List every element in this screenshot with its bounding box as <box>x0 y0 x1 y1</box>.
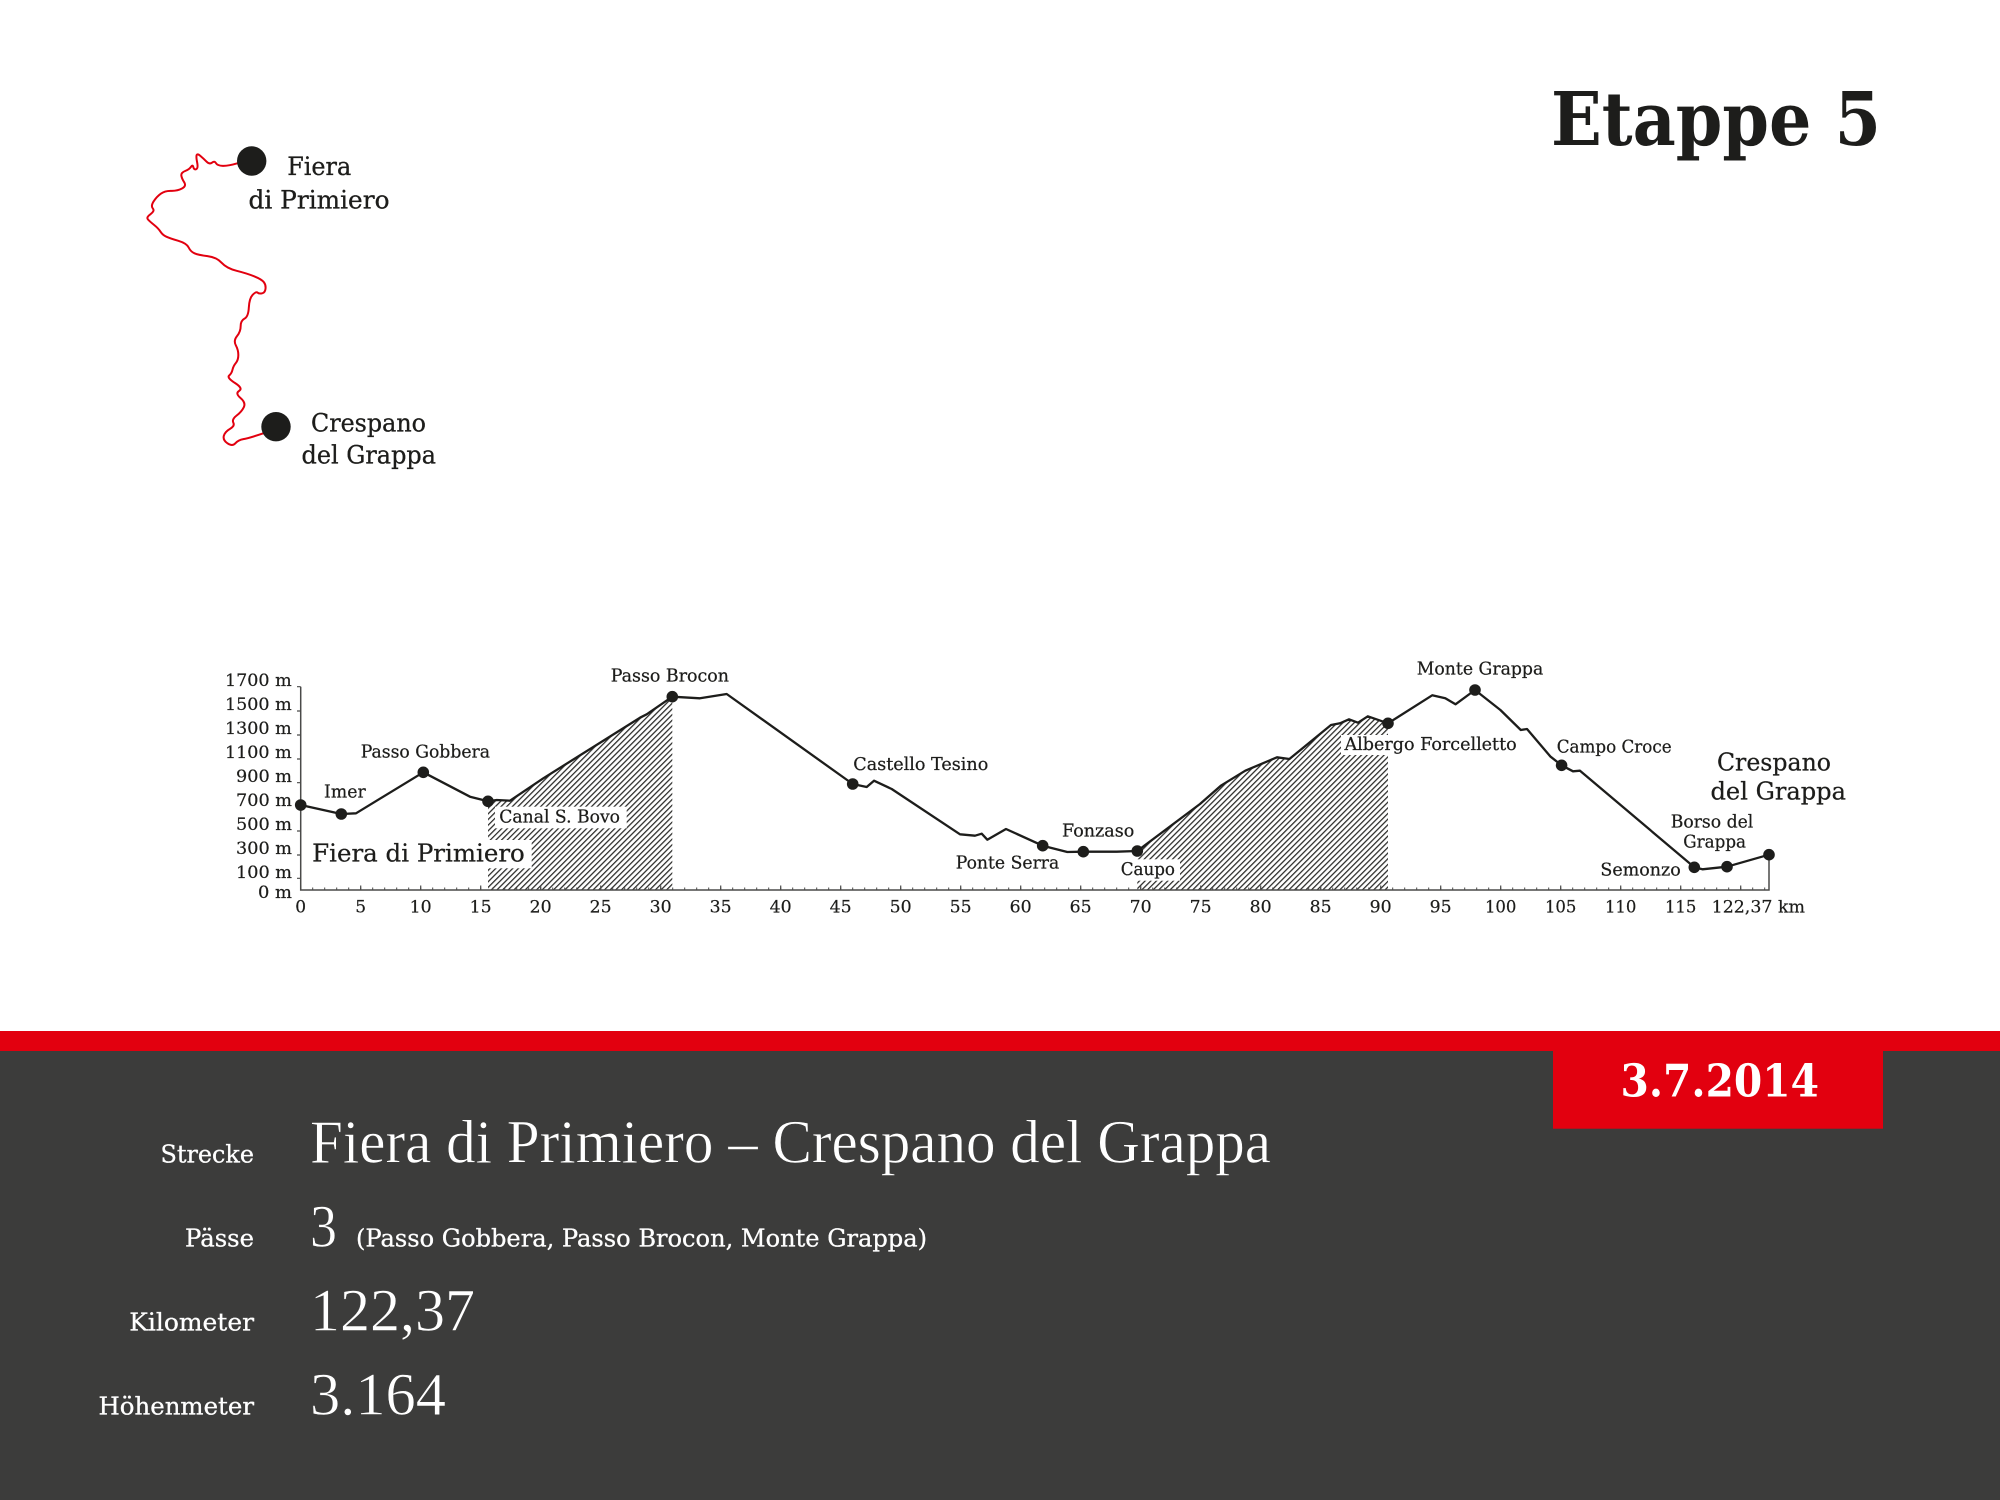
y axis labels: 300 m <box>236 839 292 859</box>
waypoint labels <box>312 658 1846 881</box>
x axis labels: 122,37 km <box>1712 897 1805 917</box>
title: Etappe 5 <box>1551 77 1881 163</box>
row: Höhenmeter <box>98 1362 446 1428</box>
row: Pässe: 3 <box>310 1194 337 1260</box>
x axis labels: 95 <box>1430 897 1452 917</box>
row: Kilometer <box>129 1278 475 1344</box>
elevation profile chart <box>225 658 1846 917</box>
waypoint labels: Crespano <box>1717 749 1831 777</box>
x axis labels: 75 <box>1190 897 1212 917</box>
x axis labels: 110 <box>1605 897 1636 917</box>
route map <box>147 146 436 469</box>
dark info panel <box>0 1051 2000 1500</box>
date badge: 3.7.2014 <box>1620 1055 1819 1108</box>
x axis labels: 85 <box>1310 897 1332 917</box>
x axis labels: 65 <box>1070 897 1092 917</box>
waypoint labels: Grappa <box>1683 832 1746 853</box>
x axis labels: 5 <box>355 897 366 917</box>
x axis labels: 55 <box>950 897 972 917</box>
x axis labels: 50 <box>890 897 912 917</box>
x axis labels: 105 <box>1545 897 1576 917</box>
elevation line <box>301 690 1769 869</box>
row: Strecke: Strecke <box>160 1141 254 1169</box>
row: Kilometer: Kilometer <box>129 1309 255 1337</box>
waypoint labels: Passo Brocon <box>611 666 729 687</box>
hatched area: climb to Passo Brocon <box>488 697 672 890</box>
waypoint labels: Fiera di Primiero <box>312 840 525 868</box>
red route line <box>147 154 266 445</box>
y axis labels: 1300 m <box>225 719 292 739</box>
waypoint labels: Imer <box>324 782 366 803</box>
end label <box>302 409 436 469</box>
waypoint labels: Albergo Forcelletto <box>1344 734 1517 755</box>
y axis labels: 0 m <box>258 883 292 903</box>
end label: Crespano <box>311 409 426 438</box>
x axis labels: 70 <box>1130 897 1152 917</box>
x axis labels: 25 <box>590 897 612 917</box>
red stripe <box>0 1031 2000 1051</box>
axes <box>297 687 1769 890</box>
end label: del Grappa <box>302 440 436 469</box>
end marker <box>261 412 291 441</box>
waypoint labels: Campo Croce <box>1557 737 1672 758</box>
y axis labels: 900 m <box>236 767 292 787</box>
waypoint labels: Castello Tesino <box>853 754 988 775</box>
y axis labels: 1100 m <box>225 743 292 763</box>
x axis labels: 35 <box>710 897 732 917</box>
y axis labels: 1500 m <box>225 695 292 715</box>
waypoint labels: Fonzaso <box>1062 821 1134 842</box>
x axis labels: 20 <box>530 897 552 917</box>
x axis labels: 10 <box>410 897 432 917</box>
y axis labels: 700 m <box>236 791 292 811</box>
x axis labels: 115 <box>1665 897 1696 917</box>
start label: Fiera <box>287 152 351 181</box>
waypoint labels: Caupo <box>1121 859 1175 880</box>
row: Kilometer: 122,37 <box>310 1278 475 1344</box>
start marker <box>237 146 266 176</box>
waypoint labels: del Grappa <box>1710 777 1846 805</box>
start label: di Primiero <box>248 185 390 214</box>
x axis labels: 40 <box>770 897 792 917</box>
row: Höhenmeter: Höhenmeter <box>98 1393 255 1421</box>
y axis labels <box>225 671 292 903</box>
x axis labels: 30 <box>650 897 672 917</box>
waypoint labels: Monte Grappa <box>1417 658 1544 679</box>
row: Pässe: Pässe <box>185 1225 254 1253</box>
white label backgrounds <box>488 735 1388 881</box>
x axis labels: 100 <box>1485 897 1516 917</box>
waypoint labels: Ponte Serra <box>956 853 1060 874</box>
waypoint dots <box>295 684 1775 873</box>
hatched area: climb to Albergo Forcelletto <box>1137 716 1388 890</box>
waypoint labels: Semonzo <box>1600 860 1681 881</box>
row: Strecke: Fiera di Primiero – Crespano del Grappa <box>310 1110 1271 1177</box>
x axis labels: 15 <box>470 897 492 917</box>
row: Pässe: (Passo Gobbera, Passo Brocon, Monte Grappa) <box>356 1225 927 1253</box>
x axis labels: 0 <box>295 897 306 917</box>
x axis labels: 90 <box>1370 897 1392 917</box>
waypoint labels: Passo Gobbera <box>361 741 490 762</box>
y axis labels: 1700 m <box>225 671 292 691</box>
x axis labels: 45 <box>830 897 852 917</box>
row: Pässe <box>185 1194 927 1260</box>
y axis labels: 500 m <box>236 815 292 835</box>
waypoint labels: Canal S. Bovo <box>499 807 620 828</box>
y axis labels: 100 m <box>236 863 292 883</box>
x axis labels <box>295 897 1805 917</box>
x axis labels: 80 <box>1250 897 1272 917</box>
waypoint labels: Borso del <box>1671 812 1754 833</box>
start label <box>248 152 390 214</box>
x axis labels: 60 <box>1010 897 1032 917</box>
date badge <box>1553 1031 1883 1129</box>
stage facts <box>98 1110 1271 1428</box>
row: Höhenmeter: 3.164 <box>310 1362 446 1428</box>
